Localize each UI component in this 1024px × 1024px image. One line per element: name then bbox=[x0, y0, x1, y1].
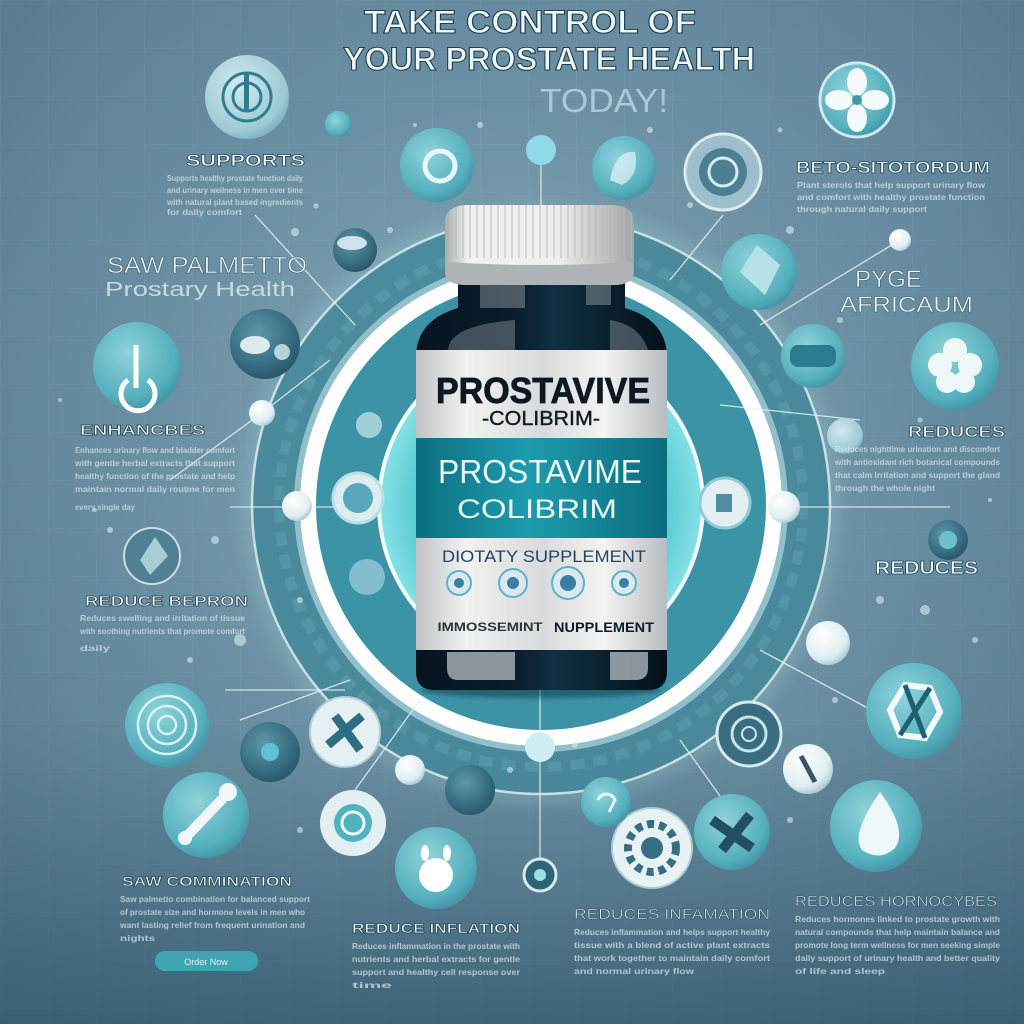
icon: teal rings bbox=[125, 683, 209, 767]
icon: bottom center pin bbox=[524, 859, 556, 891]
bottle label: PROSTAVIVE bbox=[436, 370, 650, 411]
icon: water drop bbox=[830, 780, 922, 872]
icon: blue ball bbox=[526, 135, 556, 165]
bottle label bbox=[416, 350, 667, 650]
text block: reduce inflammation left: support and healthy cell response over bbox=[352, 967, 521, 977]
text block: enhances bbox=[74, 422, 235, 512]
text block: saw palmetto: SAW PALMETTO bbox=[107, 252, 307, 278]
text block: reduce inflammation left: REDUCE INFLATION bbox=[352, 920, 520, 936]
icon: white target bbox=[320, 790, 386, 856]
text block: saw palmetto bottom: of prostate size and hormone levels in men who bbox=[120, 907, 305, 917]
text block: reduces bbox=[834, 424, 1005, 493]
text block: saw palmetto bottom bbox=[119, 873, 310, 943]
text block: supports: for daily comfort bbox=[167, 207, 242, 217]
text block: pygeum africanum: AFRICAUM bbox=[840, 292, 973, 317]
icon: bunny bbox=[395, 827, 477, 909]
text block: supports: with natural plant based ingredients bbox=[166, 197, 303, 207]
text block: reduces inflammation: that work together to maintain daily comfort bbox=[574, 953, 770, 963]
text block: supports bbox=[166, 151, 305, 217]
title: TAKE CONTROL OF bbox=[364, 4, 696, 40]
bottle label: COLIBRIM bbox=[457, 494, 617, 524]
text block: enhances: healthy function of the prostate and help bbox=[75, 471, 235, 481]
icon: pale rings bbox=[685, 134, 761, 210]
icon: white leaf X bbox=[310, 697, 380, 767]
bottle bbox=[416, 205, 667, 698]
text block: beta-sitosterol: through natural daily support bbox=[797, 204, 927, 214]
text block: reduces hormones: daily support of urinary health and better quality bbox=[795, 953, 1000, 963]
text block: saw palmetto bbox=[105, 252, 307, 301]
bottle label: DIOTATY SUPPLEMENT bbox=[442, 547, 646, 566]
bottle label: PROSTAVIME bbox=[438, 453, 642, 490]
bottle body bbox=[416, 282, 667, 690]
title bbox=[343, 4, 755, 119]
text block: saw palmetto bottom: SAW COMMINATION bbox=[122, 873, 292, 889]
text block: reduces hormones: natural compounds that help maintain balance and bbox=[795, 927, 1000, 937]
central halo rings bbox=[241, 205, 841, 805]
text block: reduces inflammation: Reduces inflammation and helps support healthy bbox=[574, 927, 770, 937]
text block: saw palmetto bottom: Saw palmetto combination for balanced support bbox=[120, 894, 310, 904]
icon: teal leaf bbox=[592, 136, 656, 200]
text label: reduces: REDUCES bbox=[875, 558, 978, 578]
text block: reduce irritation: Reduces swelling and irritation of tissue bbox=[80, 613, 245, 623]
icon: white ball with mark bbox=[783, 744, 833, 794]
bottle label: IMMOSSEMINT bbox=[438, 620, 543, 634]
text block: reduces inflammation: REDUCES INFAMATION bbox=[574, 906, 770, 923]
text block: reduce irritation: daily bbox=[80, 643, 110, 653]
icon: top left rings bbox=[205, 55, 289, 139]
icon: dark teal bbox=[240, 722, 300, 782]
text block: reduces hormones: of life and sleep bbox=[795, 966, 885, 976]
icon: white ball left bbox=[249, 400, 275, 426]
text block: supports: and urinary wellness in men over time bbox=[167, 185, 303, 195]
icon: teal crystal bbox=[721, 234, 797, 310]
icon: dark capsule bbox=[230, 309, 300, 379]
text block: enhances: ENHANCBES bbox=[80, 422, 205, 439]
text block: reduces hormones bbox=[795, 893, 1000, 976]
text block: enhances: Enhances urinary flow and bladder comfort bbox=[75, 445, 235, 455]
bottle cap bbox=[445, 205, 634, 285]
button bbox=[155, 951, 258, 971]
text block: beta-sitosterol: and comfort with healthy prostate function bbox=[797, 192, 985, 202]
text block: reduces: that calm irritation and support the gland bbox=[835, 470, 1000, 480]
text block: reduce irritation: with soothing nutrients that promote comfort bbox=[79, 626, 245, 636]
icon: teal ring bbox=[400, 128, 474, 202]
text block: beta-sitosterol: BETO-SITOTORDUM bbox=[796, 158, 990, 177]
icon: flower bbox=[820, 63, 894, 137]
icon: small teal bbox=[581, 777, 631, 827]
icon: dark teal tablet bbox=[781, 324, 845, 388]
icon: white pill right bbox=[806, 621, 850, 665]
text block: reduces hormones: REDUCES HORNOCYBES bbox=[795, 893, 997, 910]
button: Order Now bbox=[184, 957, 228, 967]
icon: dark left crystal bbox=[124, 528, 180, 584]
icon: dark spiral bbox=[717, 702, 781, 766]
text block: reduces: REDUCES bbox=[908, 424, 1005, 441]
text block: enhances: with gentle herbal extracts that support bbox=[74, 458, 235, 468]
icon: small teal ball bbox=[325, 111, 351, 137]
text block: reduce irritation bbox=[79, 593, 248, 653]
text block: reduce inflammation left: time bbox=[352, 980, 393, 990]
icon: dark teal ball bbox=[445, 765, 495, 815]
text block: saw palmetto: Prostary Health bbox=[105, 279, 295, 301]
text block: reduces inflammation bbox=[574, 906, 770, 976]
text block: reduces: Reduces nighttime urination and discomfort bbox=[835, 444, 1000, 454]
bottle label: NUPPLEMENT bbox=[554, 619, 654, 635]
text block: pygeum africanum: PYGE bbox=[855, 266, 922, 293]
text block: saw palmetto bottom: want lasting relief from frequent urination and bbox=[119, 920, 305, 930]
text block: reduces: with antioxidant rich botanical compounds bbox=[834, 457, 1000, 467]
text block: enhances: every single day bbox=[75, 502, 135, 512]
icon: bone bbox=[163, 772, 249, 858]
icon: teal X bbox=[694, 794, 770, 870]
text block: enhances: maintain normal daily routine for men bbox=[75, 484, 235, 494]
inner icons on ring bbox=[282, 412, 800, 762]
icon: molecule bbox=[866, 663, 962, 759]
text block: saw palmetto bottom: nights bbox=[120, 933, 155, 943]
text block: supports: SUPPORTS bbox=[186, 151, 305, 170]
connector lines bbox=[170, 165, 950, 860]
bottle highlights bbox=[447, 283, 648, 680]
icon: white blossom bbox=[911, 322, 999, 410]
icon: dark shell bbox=[333, 228, 377, 272]
text block: reduce inflammation left: Reduces inflammation in the prostate with bbox=[352, 941, 520, 951]
icon: pale ball bbox=[827, 418, 863, 454]
title: TODAY! bbox=[540, 82, 668, 119]
text block: reduce inflammation left bbox=[352, 920, 521, 990]
title: YOUR PROSTATE HEALTH bbox=[343, 41, 755, 77]
bottle label: -COLIBRIM- bbox=[482, 408, 600, 430]
text block: beta-sitosterol: Plant sterols that help support urinary flow bbox=[797, 180, 985, 190]
text block: reduces: through the whole night bbox=[835, 483, 935, 493]
icon: teal left bbox=[93, 322, 181, 411]
text block: pygeum africanum bbox=[840, 266, 973, 317]
text block: reduces hormones: promote long term wellness for men seeking simple bbox=[795, 940, 1000, 950]
icon: white ball bottom bbox=[395, 755, 425, 785]
text block: supports: Supports healthy prostate function daily bbox=[167, 173, 303, 183]
text block: reduces inflammation: tissue with a blend of active plant extracts bbox=[574, 940, 770, 950]
particles bbox=[58, 122, 992, 833]
icon: sun badge bbox=[612, 808, 692, 888]
text block: beta-sitosterol bbox=[796, 158, 990, 214]
text block: reduce irritation: REDUCE BEPRON bbox=[85, 593, 248, 610]
text block: reduce inflammation left: nutrients and herbal extracts for gentle bbox=[352, 954, 520, 964]
text block: reduces inflammation: and normal urinary flow bbox=[574, 966, 694, 976]
text block: reduces hormones: Reduces hormones linked to prostate growth with bbox=[795, 914, 1000, 924]
icon: white ball top right bbox=[889, 229, 911, 251]
icon: dark ball right bbox=[928, 520, 968, 560]
